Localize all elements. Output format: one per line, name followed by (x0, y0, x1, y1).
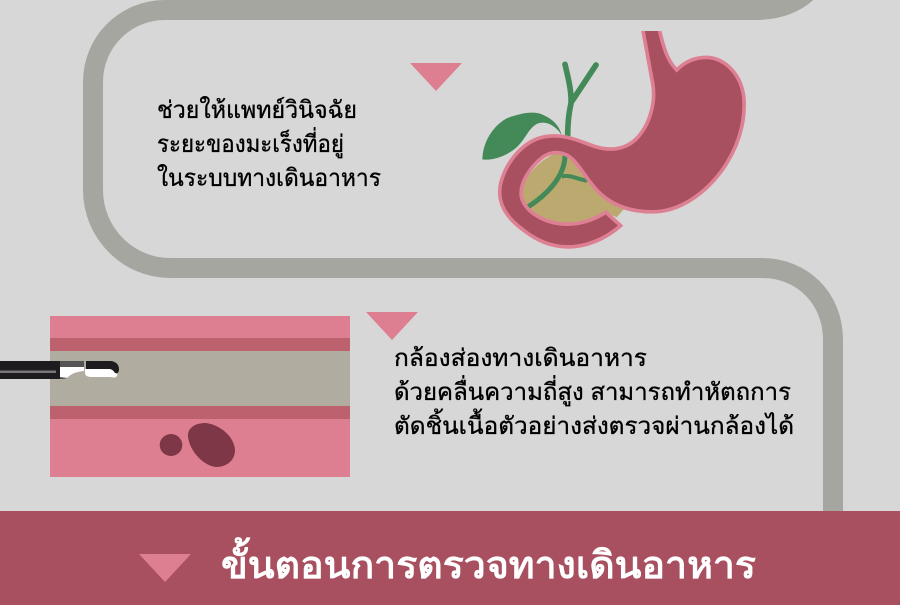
banner title: ขั้นตอนการตรวจทางเดินอาหาร (221, 537, 757, 587)
banner marker triangle (139, 554, 191, 582)
text block: upper step: ช่วยให้แพทย์วินิจฉัย (157, 96, 357, 124)
title banner (0, 511, 900, 605)
stomach (500, 20, 744, 247)
marker triangle: upper step (410, 63, 462, 91)
text block: upper step: ในระบบทางเดินอาหาร (157, 164, 381, 192)
illustration: endoscope in digestive tract (0, 316, 350, 477)
marker triangle: lower step (366, 312, 418, 340)
lesions (160, 434, 182, 456)
bile ducts (527, 64, 596, 207)
pancreas (523, 152, 624, 223)
text block: lower step: ตัดชิ้นเนื้อตัวอย่างส่งตรวจผ่านกล้องได้ (394, 408, 794, 440)
tract outer wall (50, 316, 350, 477)
endoscope (0, 361, 119, 379)
text block: lower step: ด้วยคลื่นความถี่สูง สามารถทำหัตถการ (394, 375, 791, 407)
illustration: stomach and pancreas (482, 20, 744, 247)
winding path line (93, 0, 833, 520)
tract lumen (50, 351, 350, 406)
text block: upper step (157, 96, 381, 192)
gallbladder leaf (482, 113, 562, 160)
tract inner wall bands (50, 338, 350, 351)
text block: upper step: ระยะของมะเร็งที่อยู่ (157, 127, 344, 159)
text block: lower step: กล้องส่องทางเดินอาหาร (394, 345, 647, 372)
text block: lower step (394, 345, 794, 440)
